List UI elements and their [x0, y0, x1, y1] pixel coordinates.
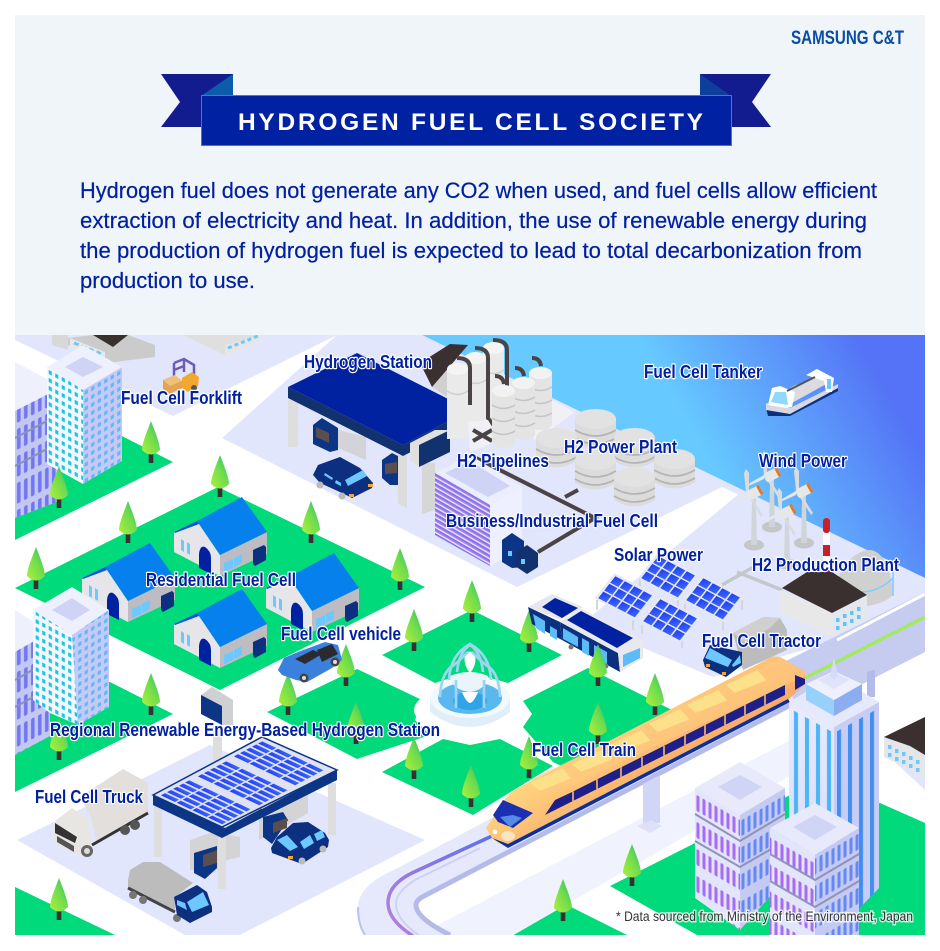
navy car: [313, 457, 373, 500]
canopy posts: [154, 783, 336, 889]
fountain: [414, 642, 510, 727]
train underside: [492, 699, 790, 848]
isometric city illustration: [15, 335, 925, 950]
bus: [528, 594, 643, 672]
labels: [35, 352, 899, 807]
station walls: [190, 795, 308, 873]
navy canopy: [288, 387, 447, 456]
labels: Wind Power: [759, 451, 847, 471]
title: HYDROGEN FUEL CELL SOCIETY: [238, 109, 703, 136]
background buildings top: [52, 335, 262, 363]
elevated track: [637, 592, 925, 833]
pump 1: [313, 418, 338, 452]
gas storage discs: [536, 409, 695, 506]
fuel cell units: [502, 533, 538, 574]
labels: H2 Power Plant: [564, 437, 677, 457]
H2 pipelines: [470, 455, 595, 552]
rail road curve: [357, 696, 795, 935]
hydrogen tanks: [447, 340, 552, 452]
intro text: Hydrogen fuel does not generate any CO2 when used, and fuel cells allow efficient: [80, 178, 877, 203]
H2 production plant: [722, 518, 893, 636]
roof panels: [532, 671, 765, 790]
header panel: [15, 15, 925, 335]
lavender platforms: [15, 335, 925, 935]
regional renewable hydrogen station: [153, 687, 337, 889]
pump 2: [382, 453, 398, 485]
labels: Fuel Cell Forklift: [121, 388, 242, 408]
labels: Fuel Cell Tanker: [644, 362, 762, 382]
grey back walls: [288, 400, 435, 514]
hydrogen station: [288, 344, 470, 514]
labels: Solar Power: [614, 545, 703, 565]
green lawns: [15, 430, 925, 935]
intro text: extraction of electricity and heat. In addition, the use of renewable energy during: [80, 208, 867, 233]
logo: Samsung C&T: SAMSUNG C&T: [791, 28, 904, 49]
pump left: [194, 846, 217, 879]
labels: Fuel Cell vehicle: [281, 624, 401, 644]
solar array: [595, 553, 743, 648]
navy car at station: [271, 822, 329, 864]
pump right: [263, 812, 288, 844]
sky and sea: [422, 335, 925, 578]
train windows: [545, 685, 785, 815]
trees: [27, 421, 664, 921]
fuel cell train: [486, 656, 805, 848]
purple building front: [770, 803, 859, 950]
icon: forklift: [163, 359, 199, 394]
intro text: [80, 178, 877, 293]
icon: tanker ship: [766, 369, 838, 416]
labels: Fuel Cell Truck: [35, 787, 144, 807]
residential houses: [82, 497, 359, 668]
intro text: the production of hydrogen fuel is expected to lead to total decarbonization from: [80, 238, 862, 263]
blue fuel cell vehicle: [278, 642, 342, 682]
lower-left office building: [33, 587, 109, 725]
labels: Fuel Cell Tractor: [702, 631, 821, 651]
solar canopy: [153, 770, 337, 838]
labels: H2 Production Plant: [752, 555, 899, 575]
windshield: [493, 800, 533, 828]
labels: Business/Industrial Fuel Cell: [446, 511, 658, 531]
lower-left purple building: [15, 610, 50, 755]
glass tower: [789, 658, 879, 935]
right small house: [884, 717, 925, 777]
wind turbines: [728, 451, 814, 570]
fuel cell truck: [54, 769, 148, 857]
dark house behind station: [420, 344, 468, 397]
labels: Regional Renewable Energy-Based Hydrogen Station: [50, 720, 440, 740]
labels: Fuel Cell Train: [532, 740, 636, 760]
business fuel cell building: [435, 455, 522, 566]
intro text: production to use.: [80, 268, 255, 293]
sign: [410, 430, 450, 467]
fuel cell tractor: [703, 617, 787, 677]
title ribbon: [161, 74, 771, 146]
labels: H2 Pipelines: [457, 451, 549, 471]
station sign: [201, 687, 233, 761]
tank truck: [128, 862, 212, 923]
tree in front of bus: [589, 644, 607, 686]
labels: Hydrogen Station: [304, 352, 432, 372]
tall office building: [47, 345, 122, 484]
labels: Residential Fuel Cell: [146, 570, 296, 590]
far-left purple building: [15, 362, 62, 518]
purple building rear: [695, 762, 785, 930]
